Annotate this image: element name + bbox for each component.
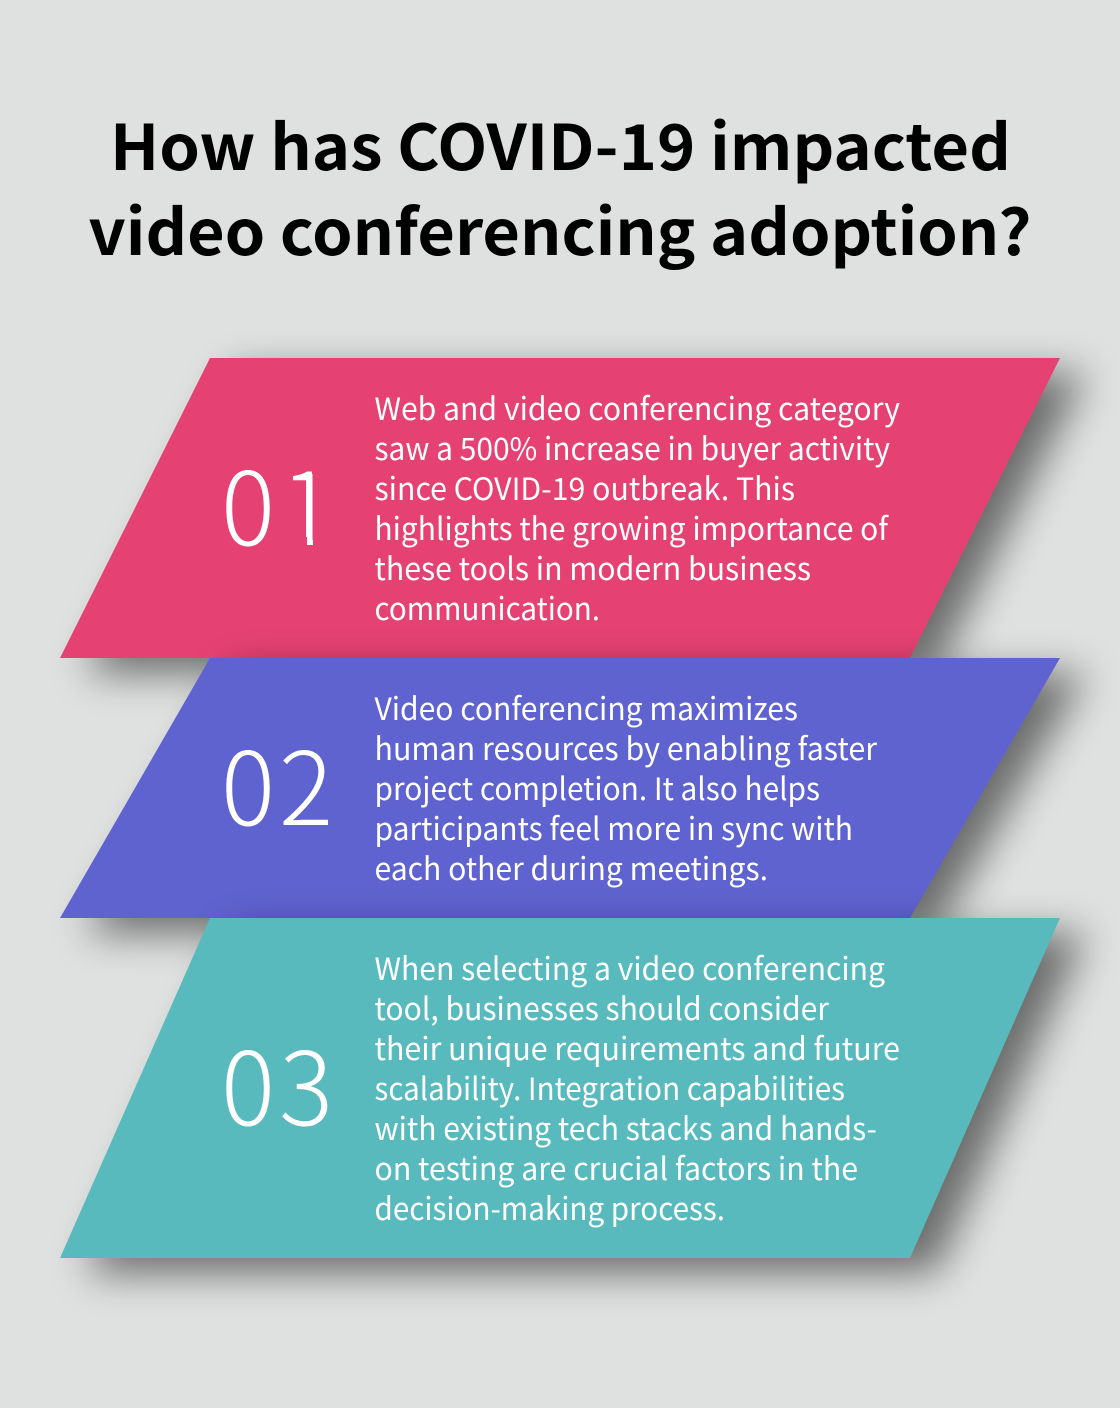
text block 03: their unique requirements and future [374,1024,900,1069]
panel: step 03 [60,918,1060,1258]
number 02: 02 [221,709,333,855]
text block 01: saw a 500% increase in buyer activity [374,424,890,469]
text block 03: on testing are crucial factors in the [374,1144,858,1189]
text block 03: When selecting a video conferencing [374,944,885,989]
panel: step 02 [60,658,1060,918]
text block 02: project completion. It also helps [374,764,820,809]
text block 03 [374,944,900,1229]
number 01: 01 [221,429,334,575]
parallelogram: indigo [60,658,1060,918]
title: video conferencing adoption? [88,183,1032,274]
text block 02: participants feel more in sync with [374,804,853,849]
text block 03: with existing tech stacks and hands- [374,1104,877,1149]
text block 03: tool, businesses should consider [374,984,830,1029]
title [88,98,1032,274]
text block 02: each other during meetings. [374,844,768,889]
number 03: 03 [221,1009,333,1155]
panel: step 01 [60,358,1060,658]
parallelogram: pink [60,358,1060,658]
text block 03: decision-making process. [374,1184,725,1229]
text block 01: these tools in modern business [374,544,811,589]
text block 01: since COVID-19 outbreak. This [374,464,795,509]
text block 03: scalability. Integration capabilities [374,1064,845,1109]
text block 02: Video conferencing maximizes [374,684,798,729]
text block 01: Web and video conferencing category [374,384,900,429]
text block 01: highlights the growing importance of [374,504,890,549]
text block 02 [374,684,878,889]
title: How has COVID-19 impacted [110,98,1011,189]
text block 02: human resources by enabling faster [374,724,878,769]
text block 01 [374,384,900,629]
text block 01: communication. [374,584,600,629]
parallelogram: teal [60,918,1060,1258]
